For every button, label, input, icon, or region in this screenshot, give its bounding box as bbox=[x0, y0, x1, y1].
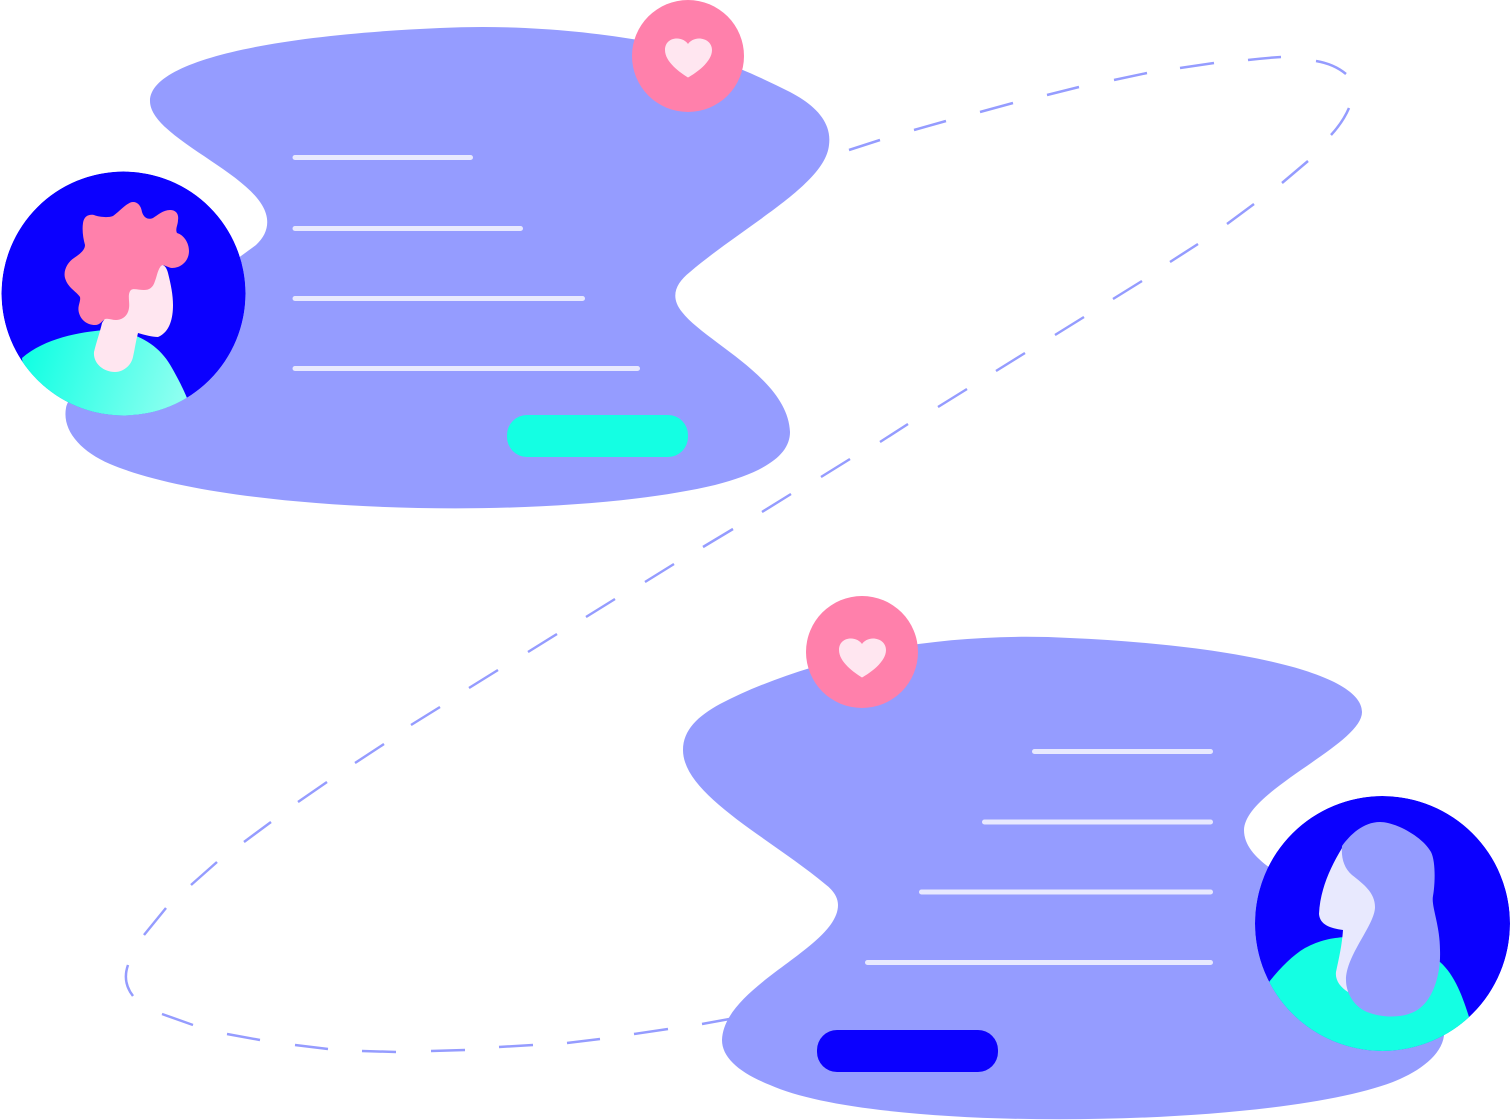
avatar: bottom right bbox=[1255, 796, 1510, 1060]
message bubble: bottom bbox=[683, 637, 1444, 1119]
message lines: top bbox=[295, 158, 638, 368]
hair bbox=[1342, 822, 1440, 1017]
button: top bbox=[507, 415, 688, 457]
heart badge: top bbox=[632, 0, 744, 112]
message lines: bottom bbox=[868, 752, 1210, 962]
heart badge: bottom bbox=[806, 596, 918, 708]
shirt bbox=[22, 330, 187, 420]
dashed connector path bbox=[126, 57, 1349, 1052]
neck and face bbox=[94, 265, 173, 372]
neck and face bbox=[1319, 848, 1380, 992]
hair bbox=[65, 202, 189, 325]
avatar: top left bbox=[2, 172, 246, 420]
message bubble: top bbox=[65, 27, 829, 508]
shirt bbox=[1269, 937, 1469, 1060]
button: bottom bbox=[817, 1030, 998, 1072]
